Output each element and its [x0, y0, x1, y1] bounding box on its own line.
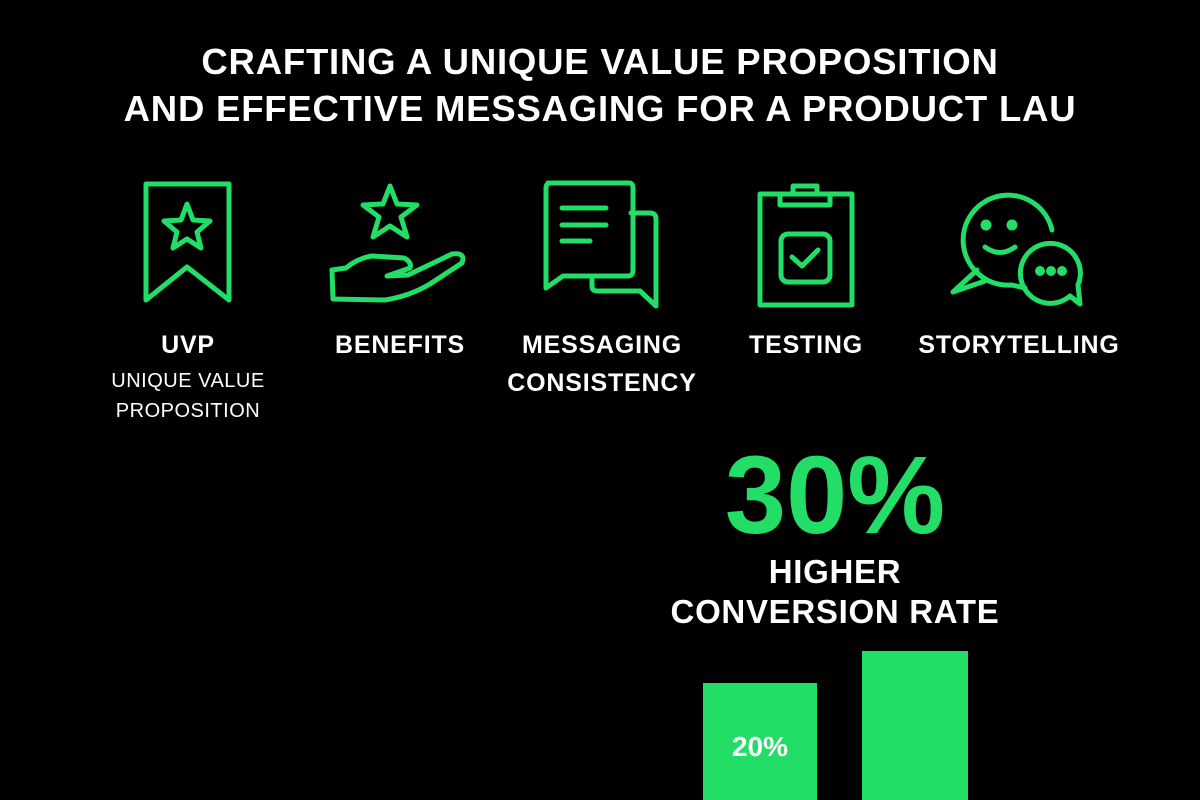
- label: messaging consistency: MESSAGING: [522, 331, 682, 359]
- label: UVP: UVP: [161, 331, 215, 359]
- title: AND EFFECTIVE MESSAGING FOR A PRODUCT LAU: [124, 88, 1076, 129]
- stat caption: HIGHER: [769, 553, 901, 590]
- label: testing: TESTING: [749, 331, 863, 359]
- icon: storytelling bubbles: [953, 195, 1080, 304]
- icon: bookmark star: [146, 184, 229, 300]
- bar chart: [703, 651, 968, 800]
- title: CRAFTING A UNIQUE VALUE PROPOSITION: [201, 41, 999, 82]
- icon: messaging: [546, 183, 656, 306]
- stat: 30%: 30%: [725, 434, 945, 557]
- label: UVP: UNIQUE VALUE: [111, 370, 265, 392]
- bar: 20%: 20%: [732, 731, 788, 762]
- title: [124, 41, 1076, 129]
- icon: hand with star: [332, 186, 463, 300]
- label: messaging consistency: CONSISTENCY: [507, 369, 697, 397]
- label: UVP: [111, 331, 265, 422]
- stat caption: [671, 553, 999, 630]
- stat caption: CONVERSION RATE: [671, 593, 999, 630]
- bar: 30%: [862, 651, 968, 800]
- icon: clipboard: [760, 186, 852, 305]
- label: storytelling: STORYTELLING: [918, 331, 1120, 359]
- bar: 20%: [703, 683, 817, 800]
- label: messaging consistency: [507, 331, 697, 397]
- label: benefits: BENEFITS: [335, 331, 465, 359]
- label: UVP: PROPOSITION: [116, 400, 260, 422]
